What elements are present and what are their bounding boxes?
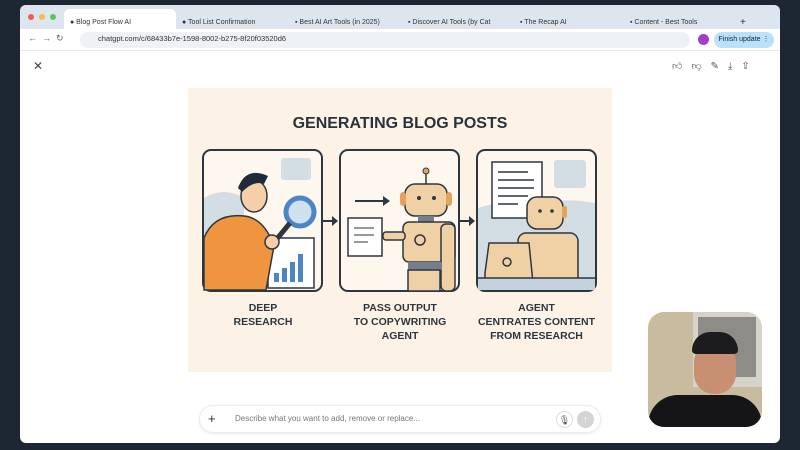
prompt input: Describe what you want to add, remove or replace... [235, 414, 420, 423]
prompt input: ↑ [583, 414, 588, 424]
prompt input [199, 405, 601, 433]
label: agent creates content: AGENT [518, 302, 555, 314]
address bar [20, 29, 780, 51]
label: deep research: DEEP [249, 302, 277, 314]
label: pass output [354, 302, 446, 342]
arrow 2 [459, 216, 475, 226]
address bar: chatgpt.com/c/68433b7e-1598-8002-b275-8f20f03520d6 [98, 34, 286, 43]
panel 1: research [203, 150, 322, 291]
toolbar icons: 👍︎👎︎✎⤓⇪ [672, 61, 759, 72]
label: agent creates content: FROM RESEARCH [490, 330, 583, 342]
infographic [188, 88, 612, 372]
webcam [648, 312, 762, 427]
prompt input: 🎙︎ [559, 415, 570, 425]
prompt input: + [208, 411, 216, 426]
title: GENERATING BLOG POSTS [293, 115, 507, 132]
label: pass output: TO COPYWRITING [354, 316, 446, 328]
label: pass output: AGENT [382, 330, 418, 342]
tab bar: ● Tool List Confirmation [182, 18, 255, 26]
tab bar: ▪ Best AI Art Tools (in 2025) [295, 18, 380, 26]
label: deep research [234, 302, 292, 328]
tab bar: ▪ Content - Best Tools [630, 18, 697, 26]
label: agent creates content: CENTRATES CONTENT [478, 316, 595, 328]
label: deep research: RESEARCH [234, 316, 292, 328]
address bar: Finish update ⋮ [718, 36, 769, 43]
panel 2: copywriting agent [340, 150, 459, 291]
tab bar: ● Blog Post Flow AI [70, 18, 131, 26]
tab bar: ▪ The Recap AI [520, 18, 567, 26]
illustrations [202, 149, 597, 292]
panel 3: content agent [477, 150, 596, 291]
tab bar: + [740, 16, 746, 28]
arrow 1 [322, 216, 338, 226]
close icon: ✕ [33, 59, 43, 73]
label: pass output: PASS OUTPUT [363, 302, 437, 314]
label: agent creates content [478, 302, 595, 342]
tab bar: ▪ Discover AI Tools (by Cat [408, 18, 490, 26]
tab bar [20, 5, 780, 29]
address bar: ← → ↻ [28, 33, 64, 43]
